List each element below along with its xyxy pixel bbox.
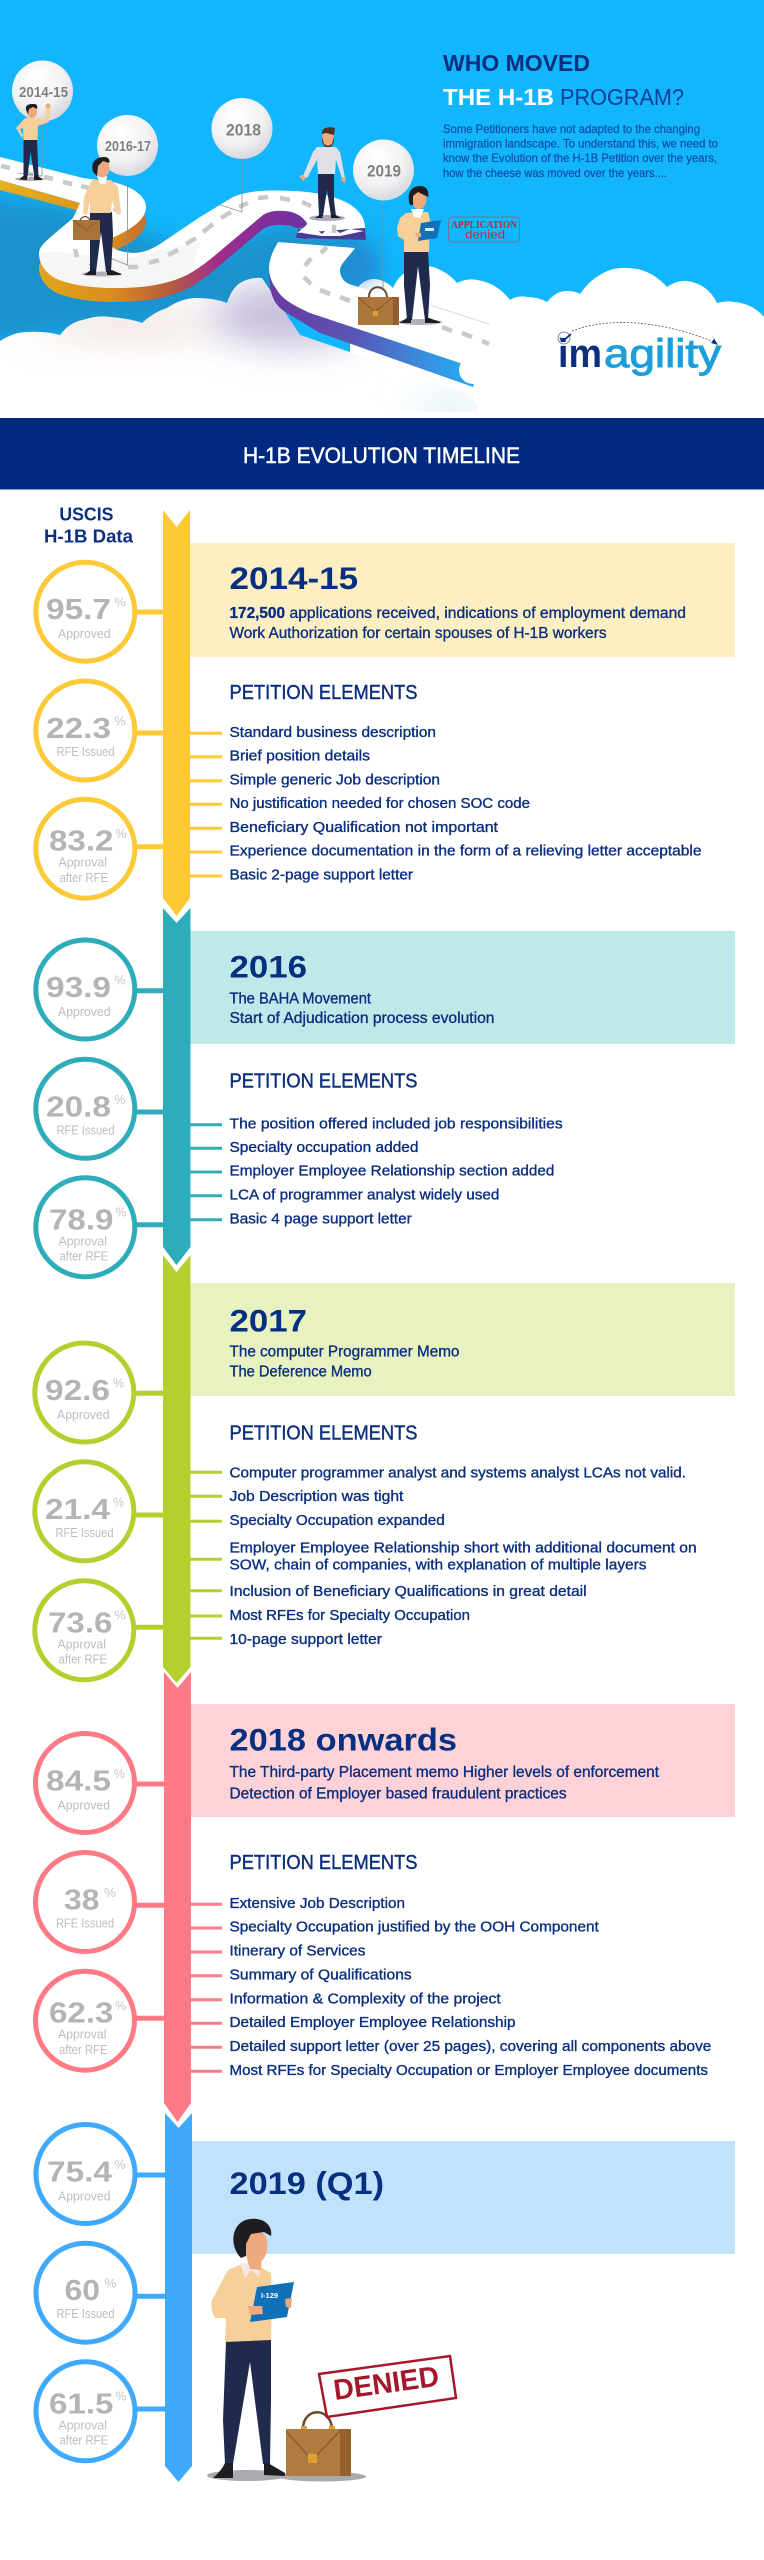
logo: imagility: im	[558, 332, 602, 376]
stat: 93.9% approved: 93.9	[46, 972, 111, 1004]
application denied stamp: denied	[465, 228, 505, 242]
balloon: 2014-15	[12, 60, 73, 122]
stat: 95.7% approved	[36, 562, 163, 661]
section: 2018 onwards	[36, 1672, 735, 2122]
hero intro paragraph: how the cheese was moved over the years....	[443, 167, 667, 180]
stat: 22.3% RFE issued	[36, 681, 163, 780]
stat: 62.3% approval after RFE	[36, 1971, 164, 2070]
stat: 21.4% RFE issued: %	[113, 1495, 124, 1509]
hero illustration	[0, 0, 764, 418]
stat: 61.5% approval after RFE	[36, 2362, 165, 2461]
year panel: 2017: The Deference Memo	[230, 1363, 372, 1380]
stat: 73.6% approval after RFE: 73.6	[48, 1607, 112, 1639]
petition elements: 2014-15: Basic 2-page support letter	[230, 868, 413, 884]
timeline arrow: yellow	[163, 510, 190, 916]
stat: 83.2% approval after RFE: after RFE	[60, 870, 108, 885]
stat: 21.4% RFE issued	[35, 1462, 163, 1561]
year panel: 2018 onwards: The Third-party Placement memo Higher levels of enforcement	[230, 1764, 660, 1781]
hero title: THE H-1B	[443, 84, 554, 110]
column heading: USCIS H-1B Data	[44, 504, 134, 546]
winding road: upper section	[0, 157, 365, 302]
stat: 75.4% approved: 75.4	[47, 2156, 112, 2188]
stat: 95.7% approved: %	[114, 596, 126, 610]
petition elements: 2014-15: Simple generic Job description	[230, 772, 440, 788]
petition elements: 2014-15: No justification needed for chosen SOC code	[230, 796, 530, 812]
balloon: 2016-17: 2016-17	[105, 139, 151, 155]
stat: 21.4% RFE issued: 21.4	[45, 1494, 110, 1526]
stat: 84.5% approved	[36, 1734, 164, 1832]
section: 2019 (Q1)	[36, 2113, 735, 2482]
stat: 92.6% approved: Approved	[57, 1407, 110, 1422]
petition elements: 2016: Employer Employee Relationship section added	[230, 1164, 554, 1180]
year panel: 2017: The computer Programmer Memo	[230, 1344, 459, 1361]
petition elements: 2014-15: PETITION ELEMENTS	[230, 682, 418, 704]
stat: 60% RFE issued	[36, 2243, 165, 2342]
year panel: 2018 onwards: 2018 onwards	[230, 1722, 457, 1758]
stat: 62.3% approval after RFE: Approval	[58, 2027, 107, 2042]
year panel: 2014-15: applications received, indications of employment demand	[290, 605, 686, 622]
year panel: 2014-15	[190, 543, 735, 657]
stat: 73.6% approval after RFE: Approval	[58, 1636, 106, 1651]
bearded person	[299, 127, 346, 221]
stat: 61.5% approval after RFE: %	[116, 2390, 126, 2404]
petition elements: 2017: 10-page support letter	[230, 1632, 382, 1648]
year panel: 2014-15: Work Authorization for certain spouses of H-1B workers	[230, 625, 607, 642]
stat: 22.3% RFE issued: %	[114, 714, 126, 728]
year panel: 2017	[190, 1283, 735, 1396]
balloon strings	[18, 120, 383, 290]
hero title	[443, 55, 684, 105]
balloon: 2019	[353, 140, 414, 200]
column heading: USCIS H-1B Data: H-1B Data	[44, 525, 134, 546]
petition elements: 2018 onwards: Detailed support letter (over 25 pages), covering all components above	[230, 2039, 711, 2055]
balloon: 2016-17	[97, 115, 158, 176]
briefcase	[286, 2412, 351, 2476]
back cloud	[350, 266, 764, 394]
petition elements: 2014-15: Beneficiary Qualification not important	[230, 820, 498, 836]
stat: 73.6% approval after RFE	[35, 1581, 163, 1680]
hero title: PROGRAM?	[560, 84, 684, 110]
petition elements: 2018 onwards: Detailed Employer Employee Relationship	[230, 2015, 516, 2031]
stat: 78.9% approval after RFE: 78.9	[49, 1204, 114, 1236]
stat: 21.4% RFE issued: RFE Issued	[56, 1525, 114, 1540]
stat: 84.5% approved: Approved	[58, 1797, 110, 1812]
stat: 20.8% RFE issued: %	[114, 1093, 126, 1107]
stat: 78.9% approval after RFE: %	[116, 1206, 126, 1220]
petition elements: 2017: PETITION ELEMENTS	[230, 1422, 418, 1444]
briefcase	[358, 287, 399, 325]
road dashes	[1, 166, 489, 344]
stat: 78.9% approval after RFE: Approval	[58, 1233, 107, 1248]
person with briefcase	[73, 157, 122, 276]
petition elements: 2016: PETITION ELEMENTS	[230, 1070, 418, 1092]
petition elements: 2017: Most RFEs for Specialty Occupation	[230, 1608, 470, 1624]
petition elements: 2017: Employer Employee Relationship short with additional document on	[230, 1540, 697, 1556]
man reading I-129 form	[207, 2219, 366, 2482]
petition elements: 2016	[190, 1070, 563, 1227]
title banner: H-1B EVOLUTION TIMELINE	[243, 443, 520, 468]
stat: 95.7% approved: 95.7	[46, 594, 111, 626]
logo: imagility: agility	[604, 332, 721, 376]
application denied stamp	[448, 217, 520, 242]
section: 2014-15	[36, 510, 735, 916]
stat: 61.5% approval after RFE: 61.5	[49, 2388, 114, 2420]
stat: 75.4% approved: Approved	[58, 2188, 111, 2203]
year panel: 2018 onwards: Detection of Employer based fraudulent practices	[230, 1785, 567, 1802]
hero intro paragraph	[443, 123, 718, 180]
man reading I-129 form: I-129	[261, 2291, 278, 2300]
stat: 78.9% approval after RFE: after RFE	[60, 1249, 108, 1264]
hero intro paragraph: Some Petitioners have not adapted to the changing	[443, 123, 700, 136]
stat: 62.3% approval after RFE: %	[115, 1999, 126, 2013]
petition elements: 2018 onwards: Specialty Occupation justified by the OOH Component	[230, 1920, 599, 1936]
stat: 78.9% approval after RFE	[36, 1178, 163, 1277]
stat: 60% RFE issued: RFE Issued	[56, 2306, 114, 2321]
stat: 75.4% approved: %	[114, 2158, 126, 2172]
stat: 83.2% approval after RFE: 83.2	[49, 826, 114, 858]
petition elements: 2018 onwards: Extensive Job Description	[230, 1896, 405, 1912]
stat: 73.6% approval after RFE: %	[114, 1609, 126, 1623]
front cloud	[459, 324, 492, 412]
petition elements: 2017	[190, 1422, 697, 1648]
stat: 38% RFE issued: %	[104, 1886, 116, 1900]
petition elements: 2018 onwards: Summary of Qualifications	[230, 1967, 412, 1983]
stat: 73.6% approval after RFE: after RFE	[58, 1652, 107, 1667]
petition elements: 2014-15: Standard business description	[230, 725, 436, 741]
winding road: lower section	[269, 242, 500, 387]
petition elements: 2017: SOW, chain of companies, with explanation of multiple layers	[230, 1558, 646, 1574]
petition elements: 2017: Inclusion of Beneficiary Qualifications in great detail	[230, 1584, 587, 1600]
stat: 38% RFE issued: 38	[64, 1884, 99, 1916]
denied stamp: DENIED	[332, 2361, 441, 2407]
petition elements: 2018 onwards: Itinerary of Services	[230, 1944, 365, 1960]
balloon: 2014-15: 2014-15	[19, 85, 68, 101]
stat: 95.7% approved: Approved	[58, 626, 111, 641]
shaded sky under road	[0, 195, 380, 345]
stat: 38% RFE issued: RFE Issued	[56, 1916, 114, 1930]
column heading: USCIS H-1B Data: USCIS	[59, 504, 113, 525]
petition elements: 2018 onwards: Most RFEs for Specialty Occupation or Employer Employee documents	[230, 2063, 708, 2079]
stat: 83.2% approval after RFE	[36, 799, 163, 898]
petition elements: 2016: LCA of programmer analyst widely used	[230, 1187, 499, 1203]
year panel: 2014-15: 172,500	[230, 605, 285, 622]
timeline arrow: teal	[163, 908, 190, 1265]
hero title: WHO MOVED	[443, 50, 590, 76]
person with book	[397, 186, 442, 325]
timeline arrow: pink	[164, 1672, 191, 2122]
petition elements: 2014-15	[190, 682, 702, 884]
year panel: 2018 onwards	[191, 1704, 735, 1817]
stat: 93.9% approved: Approved	[58, 1004, 111, 1019]
timeline arrow: blue	[165, 2113, 192, 2482]
balloon: 2019: 2019	[367, 163, 401, 181]
petition elements: 2018 onwards: PETITION ELEMENTS	[230, 1852, 418, 1874]
stat: 93.9% approved: %	[114, 974, 126, 988]
stat: 22.3% RFE issued: RFE Issued	[56, 744, 114, 759]
petition elements: 2014-15: Experience documentation in the form of a relieving letter acceptable	[230, 844, 702, 860]
stat: 60% RFE issued: 60	[64, 2275, 100, 2307]
stat: 84.5% approved: %	[114, 1767, 125, 1781]
stat: 20.8% RFE issued: RFE Issued	[56, 1122, 114, 1137]
stat: 62.3% approval after RFE: after RFE	[59, 2042, 108, 2057]
petition elements: 2018 onwards	[191, 1852, 711, 2079]
petition elements: 2016: Basic 4 page support letter	[230, 1211, 412, 1227]
stat: 83.2% approval after RFE: Approval	[58, 855, 107, 870]
timeline arrow: green	[163, 1255, 190, 1683]
logo: imagility	[558, 322, 721, 376]
person waving	[15, 104, 50, 181]
stat: 62.3% approval after RFE: 62.3	[49, 1998, 114, 2030]
year panel: 2019 (Q1)	[192, 2141, 735, 2254]
year panel: 2017: 2017	[230, 1303, 307, 1339]
year panel: 2016: Start of Adjudication process evolution	[230, 1010, 494, 1027]
stat: 84.5% approved: 84.5	[46, 1766, 111, 1798]
title banner	[0, 418, 764, 490]
stat: 20.8% RFE issued: 20.8	[46, 1091, 111, 1123]
section: 2017	[35, 1255, 735, 1683]
stat: 38% RFE issued	[36, 1852, 164, 1952]
stat: 92.6% approved	[35, 1343, 163, 1442]
denied stamp	[319, 2356, 456, 2417]
balloon: 2018	[212, 98, 272, 159]
stat: 61.5% approval after RFE: after RFE	[60, 2433, 108, 2448]
stat: 83.2% approval after RFE: %	[116, 827, 126, 841]
year panel: 2016: The BAHA Movement	[230, 990, 372, 1007]
balloon: 2018: 2018	[226, 122, 261, 140]
petition elements: 2017: Computer programmer analyst and systems analyst LCAs not valid.	[230, 1465, 686, 1481]
petition elements: 2017: Job Description was tight	[230, 1489, 403, 1505]
stat: 75.4% approved	[36, 2124, 165, 2224]
application denied stamp: APPLICATION	[451, 219, 517, 231]
hero intro paragraph: immigration landscape. To understand this, we need to	[443, 138, 718, 150]
hero intro paragraph: know the Evolution of the H-1B Petition over the years,	[443, 152, 717, 165]
stat: 92.6% approved: %	[113, 1376, 124, 1390]
petition elements: 2018 onwards: Information & Complexity of the project	[230, 1991, 501, 2007]
petition elements: 2014-15: Brief position details	[230, 748, 370, 764]
sky background	[0, 0, 764, 352]
year panel: 2016: 2016	[230, 949, 307, 985]
stat: 92.6% approved: 92.6	[45, 1375, 110, 1407]
year panel: 2019 (Q1): 2019 (Q1)	[230, 2165, 384, 2201]
broken road edge	[296, 228, 366, 240]
stat: 22.3% RFE issued: 22.3	[46, 713, 111, 745]
shaded foreground cloud	[0, 278, 478, 412]
year panel: 2016	[190, 931, 735, 1044]
section: 2016	[36, 908, 735, 1277]
petition elements: 2017: Specialty Occupation expanded	[230, 1513, 445, 1529]
petition elements: 2016: Specialty occupation added	[230, 1140, 418, 1156]
stat: 93.9% approved	[36, 940, 163, 1039]
stat: 20.8% RFE issued	[36, 1059, 163, 1158]
stat: 61.5% approval after RFE: Approval	[58, 2417, 107, 2432]
year panel: 2014-15: 2014-15	[230, 560, 358, 596]
stat: 60% RFE issued: %	[104, 2277, 116, 2291]
petition elements: 2016: The position offered included job responsibilities	[230, 1116, 563, 1132]
